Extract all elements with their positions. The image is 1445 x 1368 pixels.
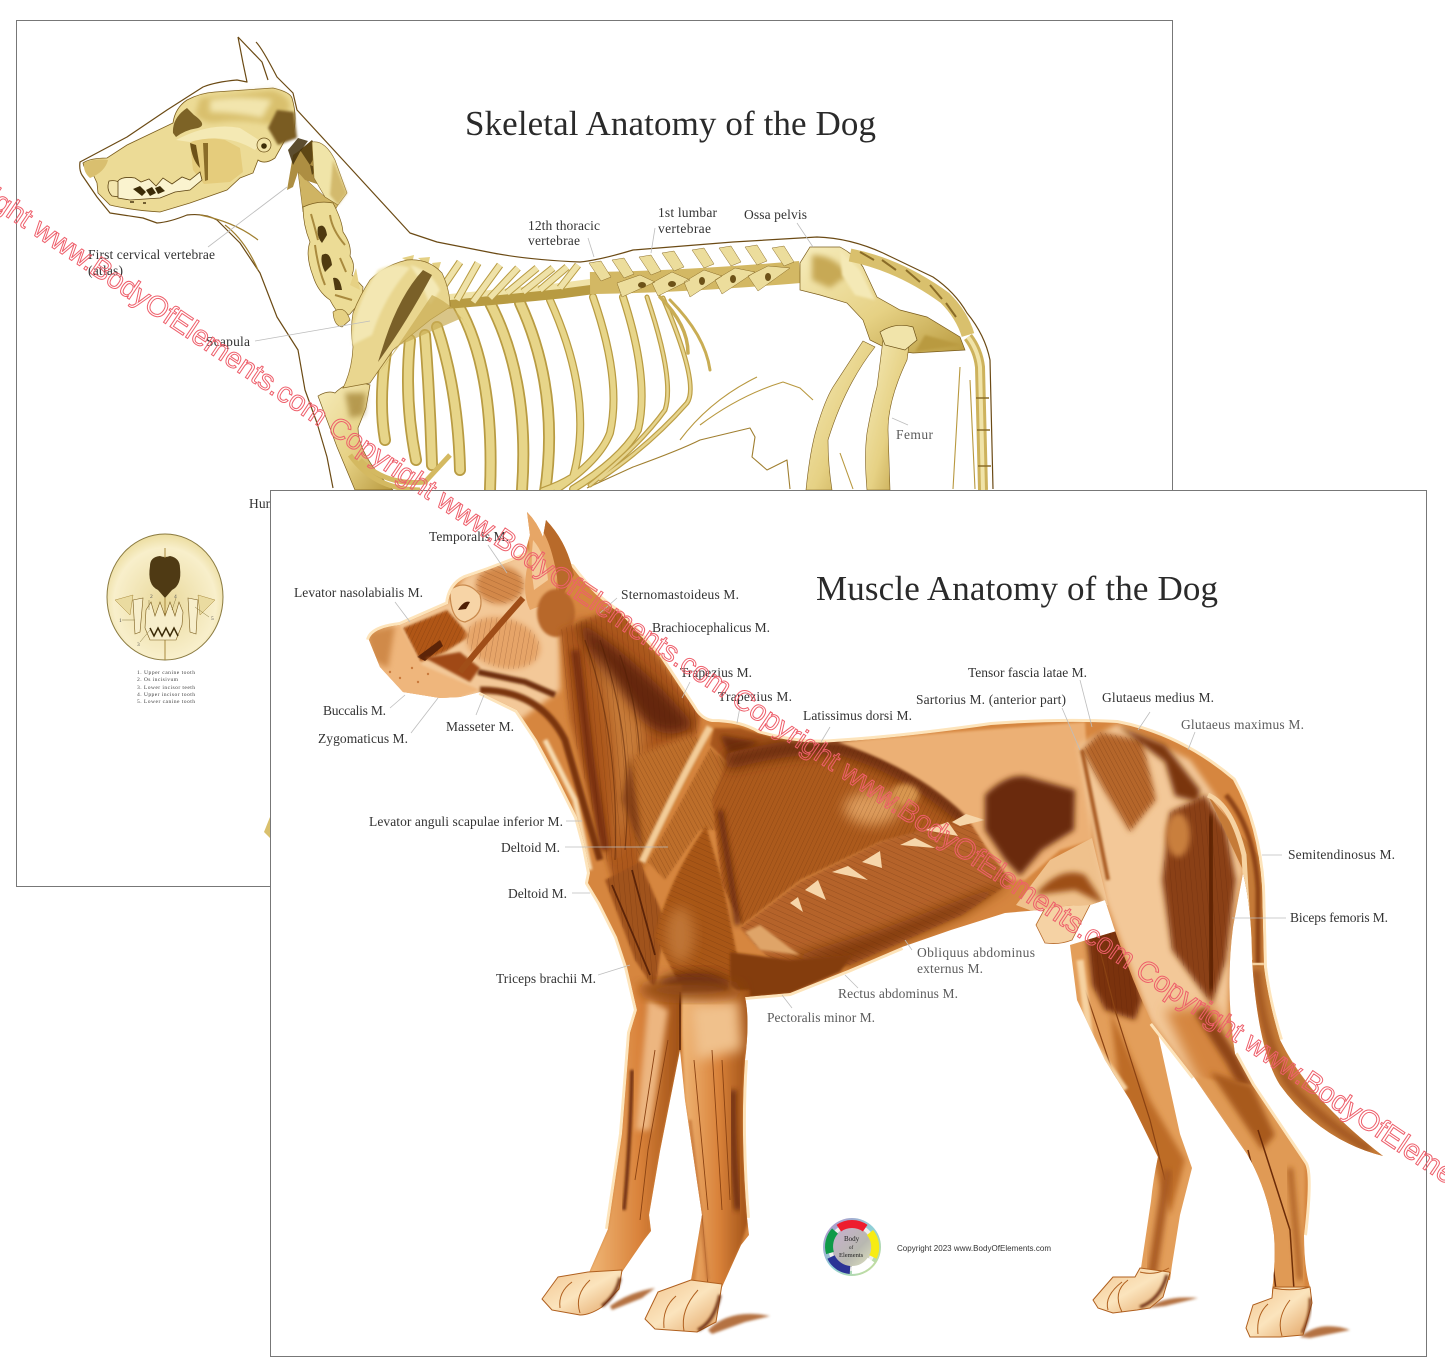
nasal	[84, 159, 108, 178]
muscle: far front leg	[588, 985, 682, 1275]
muscle: latissimus dorsi	[712, 745, 972, 925]
inset legend: 4. Upper incisor tooth	[137, 692, 195, 698]
muscle labels	[294, 529, 1395, 1025]
skeletal labels: First cervical vertebrae	[88, 247, 215, 262]
muscle: near front leg	[680, 990, 750, 1288]
muscle labels: Triceps brachii M.	[496, 971, 596, 986]
skeletal labels: vertebrae	[658, 221, 711, 236]
muscle labels: Glutaeus medius M.	[1102, 690, 1214, 705]
muscle: tail	[1208, 795, 1390, 1160]
inset callout numbers: 3	[137, 642, 140, 648]
muscle labels: Biceps femoris M.	[1290, 910, 1388, 925]
muscle labels: Latissimus dorsi M.	[803, 708, 912, 723]
sheath	[1036, 880, 1095, 944]
muscle: head	[360, 510, 575, 720]
muscle: abdominal oblique	[740, 818, 1012, 975]
inset callout numbers: 2	[150, 594, 153, 600]
muscle labels: Deltoid M.	[508, 886, 567, 901]
inset legend: 5. Lower canine tooth	[137, 699, 195, 705]
ribs	[382, 297, 710, 492]
muscle: near hind lower leg	[1194, 1072, 1305, 1292]
muscle labels: externus M.	[917, 961, 983, 976]
paw: near hind	[1246, 1287, 1312, 1337]
muscle labels: Sartorius M. (anterior part)	[916, 692, 1066, 707]
inset callout numbers: 5	[211, 616, 214, 622]
muscle: elbow blend	[638, 981, 742, 999]
muscle dog figure	[360, 505, 1390, 1345]
muscle: neck	[480, 605, 700, 905]
orbit	[173, 108, 202, 137]
scapula	[343, 260, 470, 388]
muscle: paws	[542, 1268, 1312, 1337]
muscle: flank	[838, 722, 1092, 880]
muscle: flank web	[1016, 838, 1108, 914]
inset legend: 2. Os incisivum	[137, 677, 179, 683]
paw fragment	[264, 817, 270, 838]
inset legend	[137, 670, 195, 705]
muscle labels: Levator nasolabialis M.	[294, 585, 423, 600]
paw: near front	[645, 1280, 722, 1332]
muscle labels: Glutaeus maximus M.	[1181, 717, 1304, 732]
skeletal labels: Ossa pelvis	[744, 207, 807, 222]
logo: Body of Elements: Body	[844, 1235, 860, 1243]
tail bones	[850, 252, 991, 490]
cervical vertebrae	[287, 138, 363, 327]
paw: far hind	[1093, 1268, 1170, 1313]
muscle: triceps	[655, 826, 738, 999]
paw shadows	[610, 1288, 1350, 1338]
muscle labels: Brachiocephalicus M.	[652, 620, 770, 635]
pelvis	[800, 247, 965, 353]
muscle labels: Masseter M.	[446, 719, 514, 734]
skeletal labels: Humerus	[249, 496, 299, 511]
skeletal labels: 12th thoracic	[528, 218, 600, 233]
dog body outline	[80, 37, 993, 489]
copyright note: Copyright 2023 www.BodyOfElements.com	[897, 1244, 1051, 1253]
skeletal labels: vertebrae	[528, 233, 580, 248]
muscle labels: Obliquus abdominus	[917, 945, 1035, 960]
femur bones	[806, 325, 917, 490]
muscle labels: Semitendinosus M.	[1288, 847, 1395, 862]
title: skeletal anatomy: Skeletal Anatomy of the Dog	[465, 104, 876, 143]
muscle labels: Zygomaticus M.	[318, 731, 408, 746]
muscle labels: Pectoralis minor M.	[767, 1010, 875, 1025]
muscle: serrations	[790, 814, 985, 912]
muscle labels: Deltoid M.	[501, 840, 560, 855]
inset legend: 1. Upper canine tooth	[137, 670, 195, 676]
logo: Body of Elements: Elements	[839, 1252, 864, 1259]
muscle: trapezius and shoulder	[622, 727, 800, 880]
muscle: thigh	[1078, 724, 1300, 1165]
inset legend: 3. Lower incisor teeth	[137, 685, 195, 691]
muscle labels: Rectus abdominus M.	[838, 986, 958, 1001]
skeletal labels: Scapula	[206, 334, 250, 349]
skeletal labels: 1st lumbar	[658, 205, 718, 220]
logo: Body of Elements	[823, 1218, 881, 1276]
teeth	[108, 181, 121, 197]
paw: far front	[542, 1270, 622, 1315]
humerus	[318, 383, 450, 490]
muscle labels: Tensor fascia latae M.	[968, 665, 1087, 680]
skeletal labels: (atlas)	[88, 263, 123, 278]
muscle: forearm upper	[605, 862, 665, 990]
logo: Body of Elements: of	[849, 1246, 854, 1251]
far hind leg	[1070, 931, 1192, 1280]
muscle leader lines	[390, 545, 1286, 1008]
skeletal labels: Femur	[896, 427, 934, 442]
muscle labels: Sternomastoideus M.	[621, 587, 739, 602]
dog halo	[369, 556, 1308, 1235]
spine	[402, 245, 800, 303]
skeletal leader lines	[208, 187, 908, 425]
inset: skull front view	[107, 534, 223, 705]
panel: skeletal anatomy	[16, 20, 1172, 886]
inset callout numbers: 4	[174, 594, 177, 600]
skull	[83, 88, 297, 212]
panel: muscle anatomy	[270, 490, 1426, 1356]
inset callout numbers: 1	[119, 618, 122, 624]
muscle labels: Levator anguli scapulae inferior M.	[369, 814, 563, 829]
muscle labels: Trapezius M.	[718, 689, 792, 704]
muscle labels: Temporalis M.	[429, 529, 509, 544]
muscle: pectoral	[730, 952, 852, 998]
title: muscle anatomy: Muscle Anatomy of the Dog	[816, 569, 1218, 608]
muscle labels: Trapezius M.	[680, 665, 752, 680]
inset callout numbers	[119, 594, 214, 648]
muscle: dark patch	[985, 776, 1075, 876]
skeletal labels	[88, 205, 934, 511]
muscle labels: Buccalis M.	[323, 703, 386, 718]
